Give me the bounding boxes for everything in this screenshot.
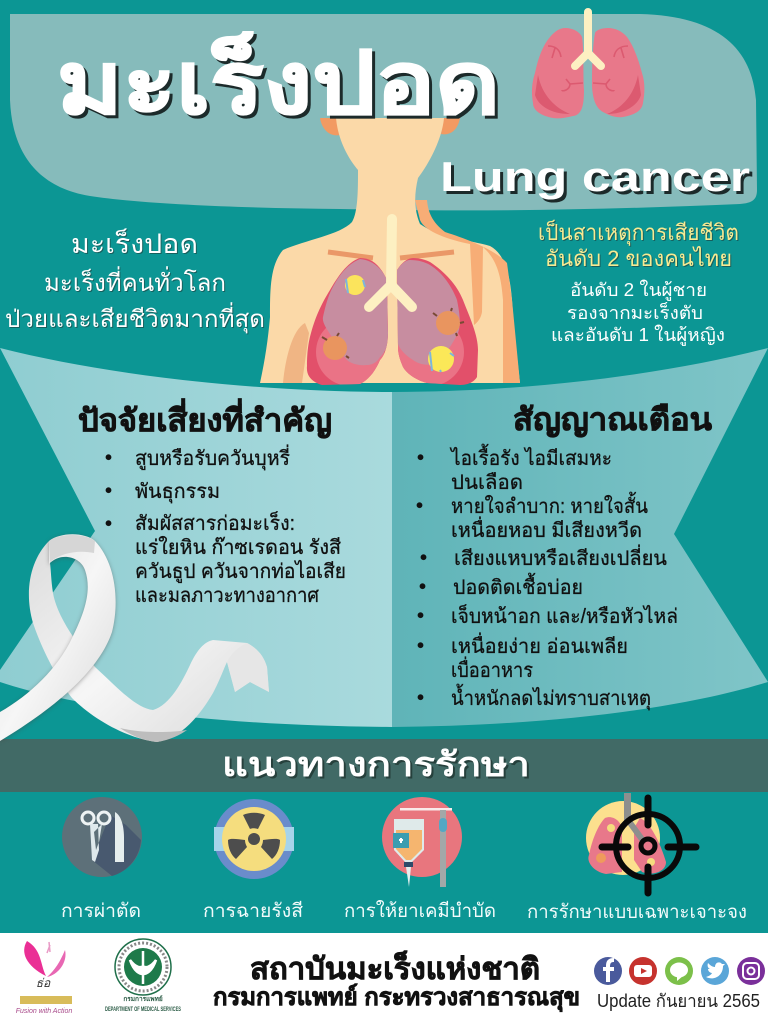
social icons (594, 957, 765, 985)
tumor: yellow lower right (428, 346, 454, 372)
treatment labels: การรักษาแบบเฉพาะเจาะจง (527, 902, 747, 923)
tumor: yellow upper left (345, 275, 365, 295)
warning sign list (416, 444, 678, 711)
institute name: สถาบันมะเร็งแห่งชาติ (250, 950, 540, 986)
subtitle: lung cancer: Lung cancer (440, 153, 750, 200)
footer (0, 933, 768, 1024)
logo: department of medical services seal: DEPARTMENT OF MEDICAL SERVICES (105, 1007, 181, 1013)
heading: risk factors: ปัจจัยเสี่ยงที่สำคัญ (78, 398, 332, 439)
warning sign list: เหนื่อยง่าย อ่อนเพลีย (451, 632, 628, 658)
risk factor list: • (105, 480, 112, 502)
warning sign list: ปอดติดเชื้อบ่อย (453, 573, 583, 599)
risk factor list (105, 444, 346, 607)
left statement: มะเร็งที่คนทั่วโลก (44, 266, 226, 297)
department and ministry: กรมการแพทย์ กระทรวงสาธารณสุข (213, 983, 580, 1013)
risk factor list: สัมผัสสารก่อมะเร็ง: (135, 510, 295, 535)
warning sign list: ไอเรื้อรัง ไอมีเสมหะ (449, 444, 612, 470)
trachea (369, 219, 412, 307)
logo: department of medical services seal: กรมการแพทย์ (123, 995, 163, 1003)
warning sign list: เบื่ออาหาร (451, 656, 533, 682)
torso (260, 118, 520, 383)
logo: pink heart emblem: ธ่อ (36, 976, 51, 990)
risk factor list: • (105, 447, 112, 469)
treatment header band (0, 739, 768, 792)
ears (320, 118, 460, 135)
warning sign list: • (420, 547, 427, 569)
tumor: orange right (433, 308, 464, 336)
right lung (397, 258, 478, 385)
panel background: warning signs (392, 348, 768, 727)
highlight: cause of death (538, 218, 739, 271)
ranking details (551, 279, 725, 346)
risk factor list: สูบหรือรับควันบุหรี่ (135, 444, 290, 471)
logo: department of medical services seal (105, 939, 181, 1013)
icon: facebook (594, 957, 622, 985)
left statement: มะเร็งปอด (71, 226, 198, 259)
heading: warning signs: สัญญาณเตือน (513, 402, 712, 438)
warning sign list: น้ำหนักลดไม่ทราบสาเหตุ (451, 684, 651, 711)
treatment labels (61, 900, 747, 923)
warning sign list: • (417, 635, 424, 657)
panel background: risk factors (0, 348, 392, 727)
warning sign list: • (417, 447, 424, 469)
warning sign list: หายใจลำบาก: หายใจสั้น (451, 492, 648, 518)
warning sign list: เสียงแหบหรือเสียงเปลี่ยน (454, 544, 667, 570)
logo: pink heart emblem (16, 941, 72, 1015)
panel: title banner (10, 14, 757, 210)
warning sign list: • (417, 687, 424, 709)
update date: Update กันยายน 2565 (597, 991, 760, 1011)
main title: มะเร็งปอด (57, 31, 500, 132)
icon: chemotherapy IV (382, 797, 462, 887)
warning sign list: เหนื่อยหอบ มีเสียงหวีด (451, 516, 642, 542)
right shoulder stripes (415, 200, 520, 383)
icon: lungs beside title (532, 12, 644, 118)
treatment labels: การฉายรังสี (203, 900, 303, 922)
warning sign list: ปนเลือด (451, 472, 523, 494)
icon: white awareness ribbon (0, 534, 269, 742)
left lung (306, 258, 388, 385)
icon: twitter (701, 957, 729, 985)
left statement (5, 226, 265, 334)
warning sign list: เจ็บหน้าอก และ/หรือหัวไหล่ (451, 603, 678, 628)
risk factor list: และมลภาวะทางอากาศ (135, 585, 319, 607)
icon: instagram (737, 957, 765, 985)
tumor: orange left (322, 333, 349, 360)
risk factor list: พันธุกรรม (135, 481, 220, 504)
warning sign list: • (417, 605, 424, 627)
icon: radiation (214, 799, 294, 879)
ranking details: รองจากมะเร็งตับ (567, 301, 703, 323)
icon: targeted therapy (586, 793, 696, 893)
panel: risk factors (0, 348, 392, 727)
ranking details: และอันดับ 1 ในผู้หญิง (551, 324, 725, 346)
treatment labels: การให้ยาเคมีบำบัด (344, 900, 496, 922)
heading: treatment: แนวทางการรักษา (222, 746, 530, 784)
warning sign list: • (416, 495, 423, 517)
risk factor list: ควันธูป ควันจากท่อไอเสีย (135, 560, 346, 584)
panel: warning signs (392, 348, 768, 727)
left arm stripe (283, 323, 309, 383)
ranking details: อันดับ 2 ในผู้ชาย (570, 279, 707, 301)
right statement (538, 218, 739, 346)
risk factor list: • (105, 513, 112, 535)
collarbones (328, 252, 454, 258)
risk factor list: แร่ใยหิน ก๊าซเรดอน รังสี (135, 536, 341, 559)
treatment labels: การผ่าตัด (61, 901, 141, 922)
left statement: ป่วยและเสียชีวิตมากที่สุด (5, 302, 265, 334)
warning sign list: • (419, 576, 426, 598)
logo: pink heart emblem: Fusion with Action (16, 1008, 72, 1015)
icon: torso with lungs (260, 118, 520, 390)
icon: surgery (62, 797, 142, 877)
icon: youtube (629, 957, 657, 985)
highlight: cause of death: เป็นสาเหตุการเสียชีวิต (538, 218, 739, 246)
highlight: cause of death: อันดับ 2 ของคนไทย (545, 246, 732, 271)
icon: line (665, 957, 693, 985)
